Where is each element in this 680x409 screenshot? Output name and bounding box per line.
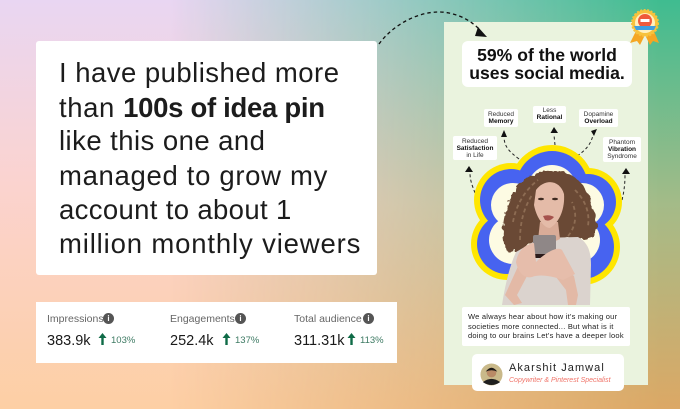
panel: main statement card: I have published more (59, 57, 339, 88)
flower: cream centre (489, 165, 604, 264)
heading: poster title: 59% of the world (477, 45, 617, 65)
hair highlights (513, 180, 588, 240)
label: reduced memory: Memory (489, 118, 513, 125)
text block: poster description: societies more connected... But what is it (468, 322, 614, 331)
stat: impressions: Impressions (47, 313, 104, 325)
flower: yellow outline (471, 145, 622, 285)
illustration: woman with phone (502, 170, 597, 305)
heading: poster title (462, 41, 632, 87)
left arm (505, 262, 530, 305)
label: less rational: Rational (537, 114, 562, 121)
icon: author avatar (480, 364, 502, 386)
neck (538, 222, 560, 242)
panel: main statement card: than 100s of idea pin (59, 92, 325, 122)
label: phantom vibration: Vibration (608, 146, 636, 153)
stat: engagements: i (239, 314, 242, 323)
panel: main statement card (36, 41, 377, 275)
stat: total audience (294, 313, 384, 349)
label: reduced memory: Reduced (488, 111, 514, 118)
stat: engagements (170, 313, 259, 349)
label: reduced satisfaction: in Life (466, 152, 484, 159)
panel: analytics stats (36, 302, 397, 363)
text block: poster description: doing to our brains Let's have a deeper look (468, 331, 624, 340)
stat: impressions: 103% (111, 335, 135, 346)
label: reduced memory (484, 109, 518, 127)
label: reduced satisfaction: Reduced (462, 138, 488, 145)
panel: main statement card: managed to grow my (59, 160, 328, 190)
icon: dashed arrows (470, 135, 625, 200)
icon: award badge (630, 9, 659, 45)
label: phantom vibration: Phantom (609, 139, 635, 146)
mouth (543, 215, 554, 221)
label: phantom vibration: Syndrome (607, 153, 637, 160)
text block: poster description: We always hear about how it's making our (468, 312, 617, 321)
flower: blue layer (477, 151, 616, 279)
panel: main statement card: account to about 1 (59, 194, 292, 224)
label: dopamine overload: Overload (584, 118, 613, 125)
stat: impressions (47, 313, 135, 349)
author role: Copywriter & Pinterest Specialist (509, 377, 611, 384)
heading: poster title: uses social media. (469, 63, 625, 83)
panel: main statement card: like this one and (59, 125, 265, 156)
panel: poster background (444, 22, 648, 385)
eyes (538, 198, 558, 200)
label: reduced satisfaction: Satisfaction (457, 145, 493, 152)
label: dopamine overload: Dopamine (584, 111, 613, 118)
stat: total audience: i (367, 314, 370, 323)
panel: author card (472, 354, 624, 391)
stat: engagements: Engagements (170, 313, 235, 325)
label: phantom vibration (603, 137, 641, 162)
label: dopamine overload (579, 109, 618, 127)
panel: main statement card: million monthly viewers (59, 228, 361, 258)
stat: total audience: Total audience (294, 313, 362, 325)
author name: Akarshit Jamwal (509, 362, 605, 374)
phone (533, 235, 556, 257)
stat: total audience: 311.31k (294, 333, 345, 349)
chart: flower and arrows illustration (465, 127, 630, 305)
stat: engagements: 252.4k (170, 333, 214, 349)
stat: total audience: 113% (360, 335, 384, 346)
sweater (502, 237, 591, 305)
icon: arrowheads (465, 127, 630, 174)
face (534, 182, 564, 228)
right arm (556, 268, 578, 305)
arrow: dashed curve from card to poster (378, 11, 487, 44)
hair (503, 170, 597, 252)
stat: impressions: i (107, 314, 110, 323)
label: less rational (533, 106, 566, 123)
stat: engagements: 137% (235, 335, 259, 346)
label: less rational: Less (543, 107, 556, 114)
hands (516, 243, 575, 280)
label: reduced satisfaction (453, 136, 497, 160)
text block: poster description (462, 307, 630, 346)
stat: impressions: 383.9k (47, 333, 91, 349)
